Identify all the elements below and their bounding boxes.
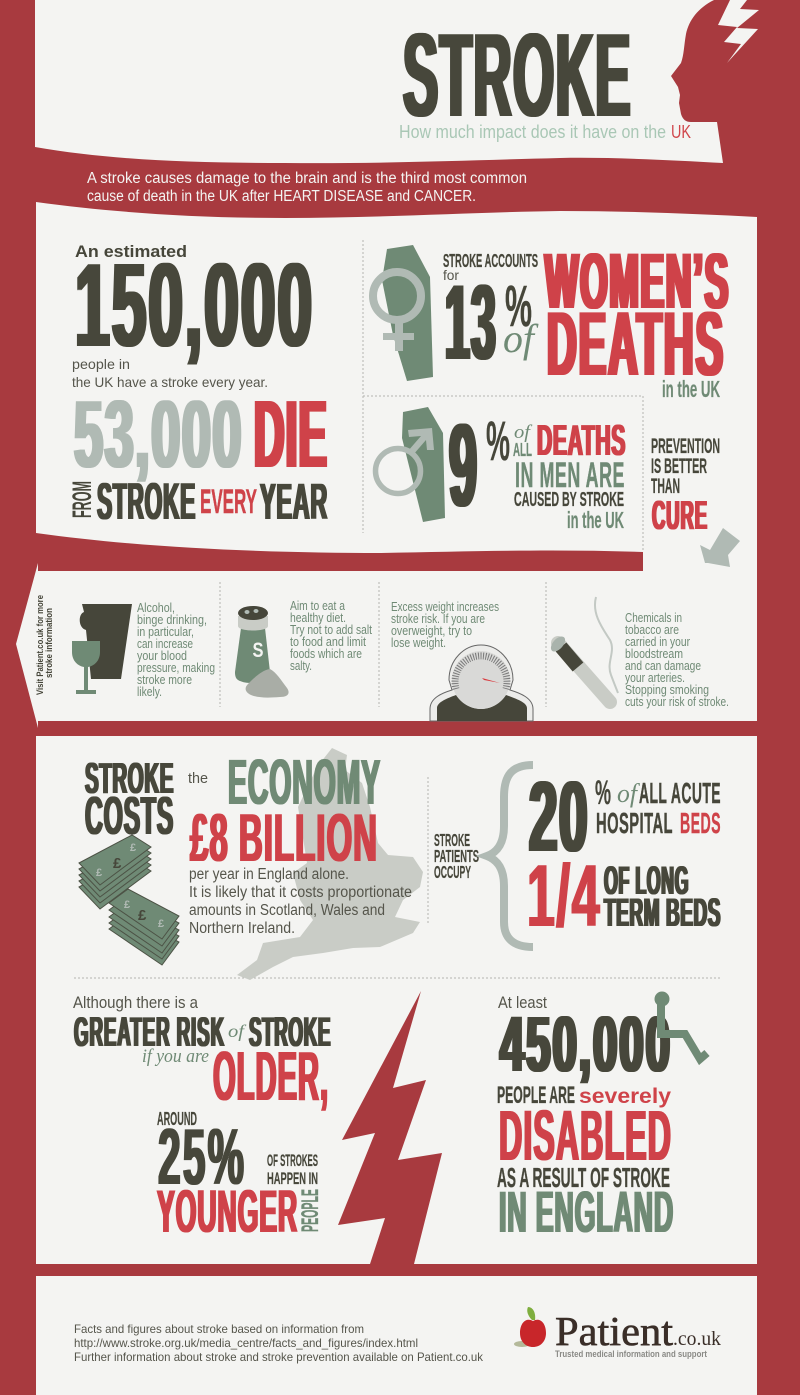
stat: 53,000 die from stroke every year: EVERY (200, 483, 257, 521)
tip: weight: overweight, try to (391, 623, 472, 638)
dotted dividers (74, 240, 720, 978)
subtitle: UK (671, 122, 691, 142)
logo: Patient.co.uk: Patient (555, 1308, 674, 1354)
stat: stroke costs the economy: amounts in Scotland, Wales and (189, 902, 385, 919)
icon: apple (514, 1307, 546, 1347)
stat: stroke costs the economy: ECONOMY (228, 746, 381, 818)
icon: beer and wine glasses (72, 604, 132, 694)
icon: stacks of pound notes: £ (124, 899, 130, 911)
stat: older and younger risk: of (228, 1021, 247, 1041)
stat: women's deaths: STROKE ACCOUNTS (443, 251, 538, 271)
icon: weighing scale (430, 645, 533, 721)
stat: older and younger risk: OF STROKES (267, 1152, 318, 1170)
tip: smoking: carried in your (625, 634, 691, 649)
footer: sources: Further information about stroke and stroke prevention available on Patient.co.uk (74, 1350, 484, 1364)
stat: hospital beds: 1/4 (527, 846, 601, 945)
logo: Patient.co.uk: Trusted medical information and support (555, 1349, 707, 1359)
stat: women's deaths: in the UK (662, 376, 720, 402)
stat: hospital beds: 20 (529, 761, 589, 873)
stat: stroke costs the economy: per year in England alone. (189, 866, 349, 883)
text: prevention is better than cure: THAN (651, 475, 680, 498)
map: England (237, 748, 423, 980)
tip: weight: Excess weight increases (391, 599, 499, 614)
stat: stroke costs the economy: the (188, 770, 208, 787)
stat: 53,000 die from stroke every year: STROKE (97, 473, 196, 531)
logo: Patient.co.uk: .co.uk (673, 1328, 721, 1350)
stat: 53,000 die from stroke every year: FROM (67, 481, 97, 518)
footer: sources (74, 1322, 484, 1364)
tip: alcohol: pressure, making (137, 660, 215, 675)
text: DEATHS (537, 416, 626, 465)
stat: men's deaths: 9 (449, 400, 477, 532)
stat: men's deaths: in the UK (567, 507, 624, 533)
panel: footer (36, 1276, 757, 1395)
intro text: cause of death in the UK after HEART DISEASE and CANCER. (87, 188, 476, 205)
tip: alcohol: likely. (137, 684, 162, 699)
stat: hospital beds: STROKE (434, 830, 470, 850)
tip: smoking: tobacco are (625, 622, 679, 637)
tip: alcohol: in particular, (137, 624, 194, 639)
tip: alcohol: binge drinking, (137, 612, 207, 627)
stat: hospital beds: % (595, 774, 611, 812)
tip: salt: salty. (290, 658, 312, 673)
side label: visit Patient.co.uk: stroke information (44, 608, 54, 678)
stat: men's deaths: CAUSED BY STROKE (514, 489, 624, 511)
stat: older and younger risk: Although there is a (73, 993, 198, 1012)
stat: older and younger risk: 25% (158, 1112, 246, 1201)
stat: men's deaths: ALL (513, 440, 532, 460)
stat: hospital beds: HOSPITAL (596, 808, 673, 840)
stat: women's deaths: for (443, 267, 459, 283)
text: DIE (254, 381, 328, 488)
stat: older and younger risk: GREATER RISK (74, 1008, 225, 1055)
stat: men's deaths: % (486, 409, 510, 472)
stat: 450,000 disabled: PEOPLE ARE (497, 1082, 575, 1109)
tip: salt: to food and limit (290, 634, 366, 649)
stat: 53,000 die from stroke every year: 53,000 (74, 381, 243, 488)
tip: smoking: cuts your risk of stroke. (625, 694, 729, 709)
text: BEDS (680, 808, 721, 840)
tip: alcohol: Alcohol, (137, 600, 175, 615)
icon: salt shaker and pile: S (252, 639, 264, 662)
subtitle: How much impact does it have on the (399, 122, 666, 142)
panel: header background with head silhouette (35, 0, 723, 163)
icon: coffin with female symbol (373, 245, 433, 381)
text: STROKE (249, 1008, 331, 1055)
stat: 150,000 strokes a year (72, 239, 314, 390)
intro text: A stroke causes damage to the brain and is the third most common (87, 170, 527, 187)
tip: salt: Aim to eat a (290, 598, 346, 613)
stat: 450,000 disabled (497, 992, 707, 1245)
icon: cigarette with smoke (548, 597, 618, 702)
tip: alcohol: stroke more (137, 672, 192, 687)
tip: alcohol: your blood (137, 648, 187, 663)
stat: men's deaths: of (514, 422, 533, 443)
stat: stroke costs the economy (85, 746, 412, 937)
stat: 450,000 disabled: severely (579, 1085, 671, 1108)
arrow: down to prevention tips (700, 528, 740, 567)
icon: stacks of pound notes: £ (138, 907, 147, 924)
text: prevention is better than cure: PREVENTION (651, 435, 720, 458)
tip: weight (391, 599, 533, 721)
stat: stroke costs the economy: COSTS (85, 786, 174, 846)
icon: coffin with male symbol (376, 407, 445, 522)
stat: 450,000 disabled: At least (498, 993, 547, 1012)
intro text (87, 170, 527, 205)
stat: older and younger risk: HAPPEN IN (267, 1169, 318, 1188)
icon: curly brace (487, 765, 533, 947)
tip: weight: lose weight. (391, 635, 446, 650)
icon: lightning bolt in head (718, 0, 759, 63)
stat: women's deaths: 13 (445, 262, 497, 382)
tip: salt (235, 598, 372, 698)
stat: hospital beds: of (617, 779, 641, 808)
stat: older and younger risk (73, 993, 331, 1245)
stat: women's deaths: of (503, 316, 539, 361)
icon: stacks of pound notes: £ (158, 918, 164, 930)
stat: older and younger risk: YOUNGER (157, 1178, 298, 1245)
tip: alcohol: can increase (137, 636, 193, 651)
stat: 150,000 strokes a year: An estimated (75, 242, 187, 261)
stat: stroke costs the economy: STROKE (85, 754, 174, 803)
stat: 150,000 strokes a year: people in (72, 356, 130, 372)
stat: 150,000 strokes a year: 150,000 (75, 239, 314, 372)
stat: stroke costs the economy: Northern Ireland. (189, 920, 295, 937)
stat: stroke costs the economy: £8 BILLION (190, 800, 378, 876)
tip: smoking: Stopping smoking (625, 682, 709, 697)
stat: 150,000 strokes a year: the UK have a stroke every year. (72, 374, 268, 390)
footer: sources: Facts and figures about stroke based on information from (74, 1322, 364, 1336)
stat: older and younger risk: PEOPLE (297, 1189, 324, 1232)
text: prevention is better than cure: IS BETTER (651, 455, 707, 478)
icon: stacks of pound notes: £ (96, 867, 102, 879)
stat: 53,000 die from stroke every year (67, 381, 328, 531)
stat: older and younger risk: AROUND (157, 1108, 197, 1129)
icon: red lightning bolt (338, 991, 442, 1264)
text: prevention is better than cure: CURE (652, 492, 708, 538)
icon: wheelchair user (654, 992, 707, 1059)
panel: statistics (36, 202, 757, 571)
icon: stacks of pound notes: £ (113, 855, 122, 872)
tip: alcohol (72, 600, 215, 699)
logo: Patient.co.uk (514, 1307, 721, 1359)
tip: salt: Try not to add salt (290, 622, 372, 637)
tip: smoking: bloodstream (625, 646, 683, 661)
stat: hospital beds: OCCUPY (434, 862, 471, 882)
text: OLDER, (213, 1037, 329, 1115)
stat: men's deaths (376, 400, 626, 533)
stat: women's deaths: % (505, 274, 532, 339)
side label: visit Patient.co.uk (35, 595, 54, 695)
panel: prevention tips with left arrow (16, 563, 757, 728)
stat: stroke costs the economy: It is likely that it costs proportionate (189, 884, 412, 901)
stat: women's deaths (373, 236, 730, 402)
text: YEAR (260, 473, 328, 530)
tip: salt: healthy diet. (290, 610, 346, 625)
tip: weight: stroke risk. If you are (391, 611, 485, 626)
text: prevention is better than cure (651, 435, 720, 538)
tip: salt: foods which are (290, 646, 362, 661)
tip: smoking: and can damage (625, 658, 701, 673)
stat: men's deaths: IN MEN ARE (515, 456, 625, 495)
footer: sources: http://www.stroke.org.uk/media_centre/facts_and_figures/index.html (74, 1336, 418, 1350)
stat: hospital beds (434, 761, 721, 947)
stat: hospital beds: OF LONG (604, 859, 689, 903)
stat: hospital beds: PATIENTS (434, 846, 479, 866)
icon: stacks of pound notes: £ (130, 842, 136, 854)
tip: smoking (548, 597, 729, 709)
icon: stacks of pound notes (79, 835, 179, 965)
tip: smoking: Chemicals in (625, 610, 682, 625)
stat: older and younger risk: if you are (142, 1046, 209, 1067)
side label: visit Patient.co.uk: Visit Patient.co.uk for more (35, 595, 45, 695)
tip: smoking: your arteries. (625, 670, 685, 685)
panel: costs and disability (36, 736, 757, 1264)
